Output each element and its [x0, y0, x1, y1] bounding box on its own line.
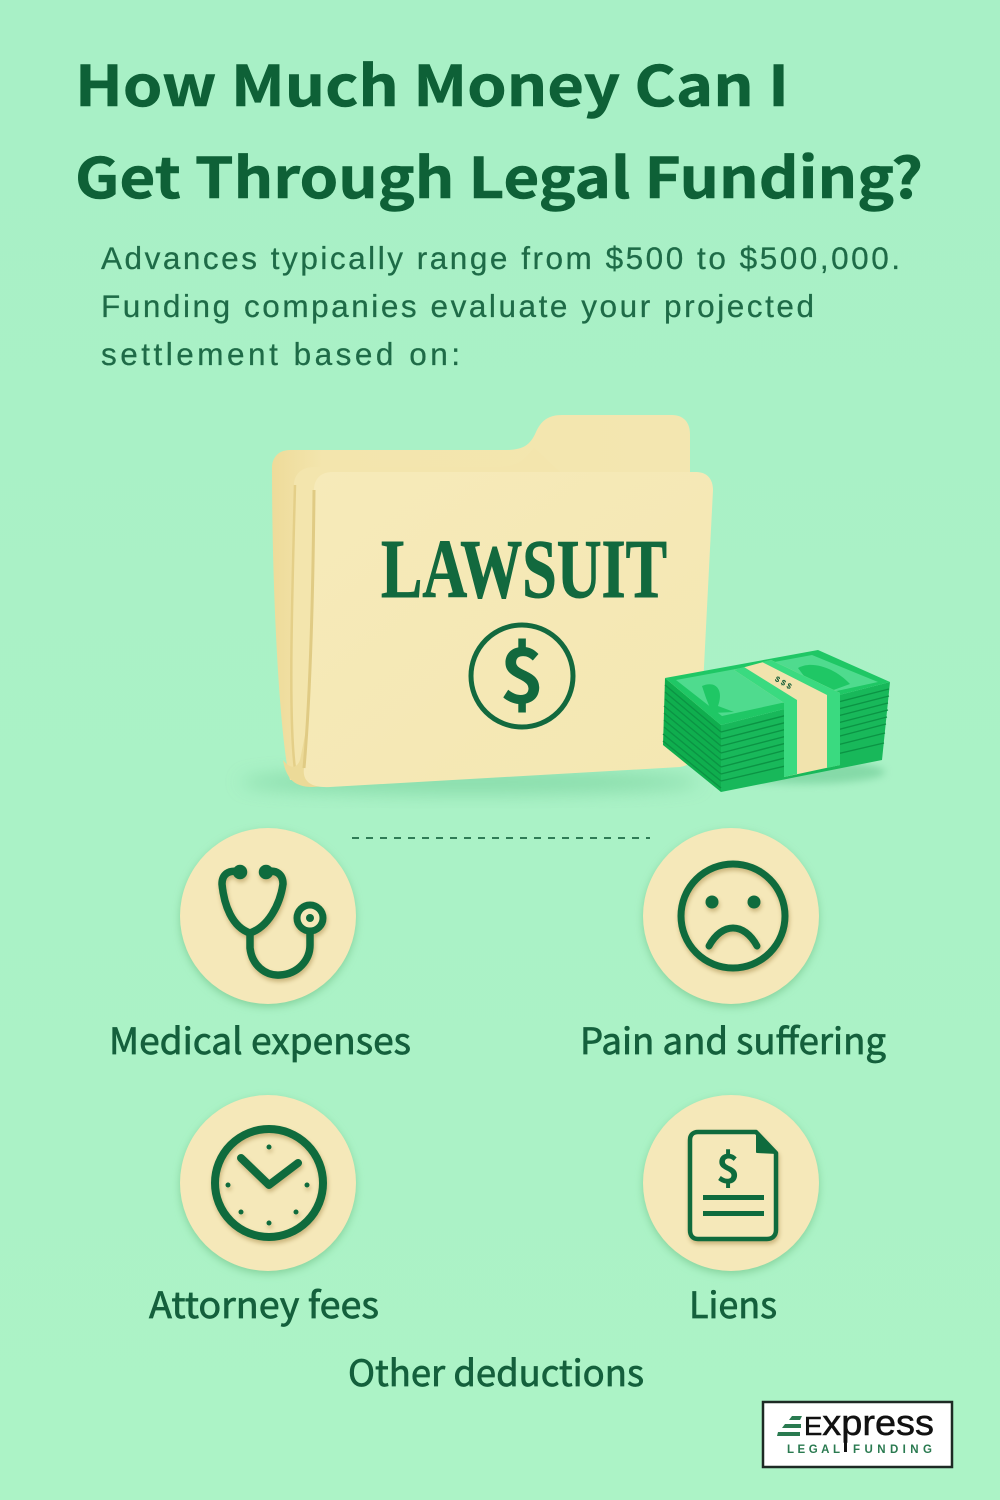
item: attorney fees	[149, 1095, 379, 1329]
label: liens: Liens	[689, 1277, 777, 1329]
folder illustration	[240, 415, 713, 794]
folder front	[304, 472, 713, 787]
folder dollar badge: $	[500, 615, 544, 725]
money stack: $ $ $	[773, 674, 794, 691]
logo: express legal funding: LEGAL	[787, 1444, 840, 1456]
intro text	[101, 240, 900, 372]
label: pain and suffering: Pain and suffering	[580, 1013, 886, 1065]
icon: sad face	[681, 864, 785, 968]
folder dollar badge	[471, 615, 573, 727]
item: medical expenses	[109, 828, 411, 1065]
title: Get Through Legal Funding?	[75, 134, 923, 215]
title	[75, 42, 923, 215]
logo: express legal funding: FUNDING	[853, 1444, 932, 1456]
logo: express legal funding	[763, 1402, 952, 1467]
label: other deductions: Other deductions	[348, 1345, 644, 1397]
intro text: settlement based on:	[101, 336, 460, 372]
intro text: Advances typically range from $500 to $500,000.	[101, 240, 900, 276]
intro text: Funding companies evaluate your projected	[101, 288, 814, 324]
item: pain and suffering	[580, 828, 886, 1065]
icon: clock	[215, 1129, 323, 1237]
icon: stethoscope	[222, 868, 323, 975]
folder fold	[283, 700, 330, 787]
logo speed bars	[777, 1416, 802, 1436]
divider	[352, 837, 650, 839]
title: How Much Money Can I	[75, 42, 789, 123]
icon: document	[690, 1132, 777, 1239]
money stack	[663, 650, 890, 792]
item: liens	[643, 1095, 819, 1329]
label: medical expenses: Medical expenses	[109, 1013, 411, 1065]
folder label: lawsuit: LAWSUIT	[381, 523, 667, 616]
icon: document: $	[716, 1137, 740, 1195]
folder middle sheet	[290, 448, 560, 783]
label: attorney fees: Attorney fees	[149, 1277, 379, 1329]
folder back with tab	[272, 415, 690, 780]
logo: express legal funding: Express	[804, 1402, 934, 1443]
money band	[734, 660, 840, 777]
